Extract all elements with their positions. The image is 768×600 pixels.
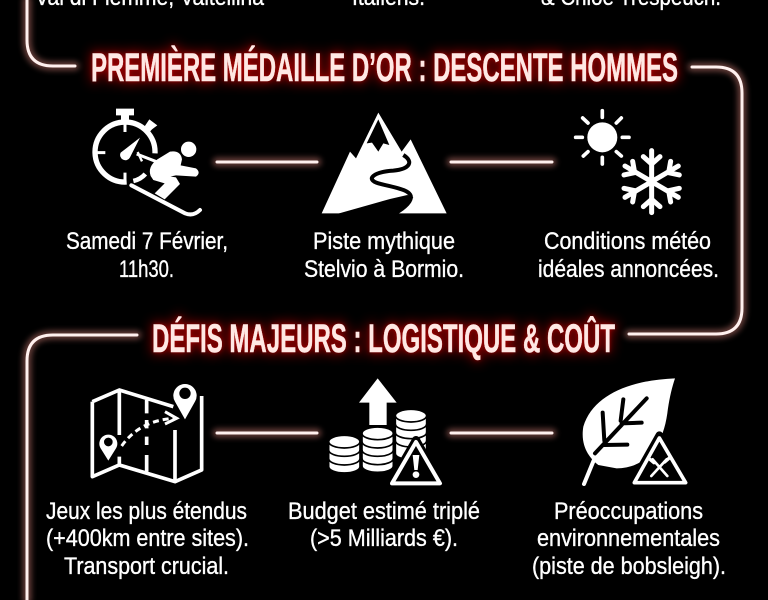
text: jeux les plus étendus: Jeux les plus étendus — [46, 498, 247, 525]
icon: sun and snowflake — [576, 111, 679, 213]
text: conditions météo: Conditions météo — [544, 228, 711, 255]
icon: map with route pins — [92, 384, 202, 482]
icon: leaf with warning tools — [583, 378, 688, 484]
text: préoccupations environnementales — [532, 498, 726, 580]
icon: mountain with piste — [322, 113, 447, 215]
text: budget estimé triplé: Budget estimé triplé — [288, 498, 480, 525]
text: piste mythique: Piste mythique — [313, 228, 455, 255]
icon: coins, rising arrow and warning — [329, 378, 442, 484]
text: jeux les plus étendus: Transport crucial. — [64, 553, 229, 580]
text: préoccupations environnementales: Préoccupations — [554, 498, 703, 525]
text: jeux les plus étendus — [46, 498, 249, 580]
text: budget estimé triplé — [288, 498, 480, 552]
text: conditions météo: idéales annoncées. — [538, 256, 719, 283]
text: jeux les plus étendus: (+400km entre sites). — [46, 525, 249, 552]
text: samedi 7 février: 11h30. — [119, 256, 174, 283]
top text fragments — [35, 0, 721, 11]
text: piste mythique — [304, 228, 464, 283]
text: conditions météo — [538, 228, 719, 283]
text: préoccupations environnementales: environnementales — [537, 525, 720, 552]
icon: stopwatch and skier — [94, 109, 200, 214]
text: samedi 7 février — [66, 228, 228, 283]
text: piste mythique: Stelvio à Bormio. — [304, 256, 464, 283]
text: budget estimé triplé: (>5 Milliards €). — [310, 525, 458, 552]
text: samedi 7 février: Samedi 7 Février, — [66, 228, 228, 255]
text: préoccupations environnementales: (piste de bobsleigh). — [532, 553, 726, 580]
